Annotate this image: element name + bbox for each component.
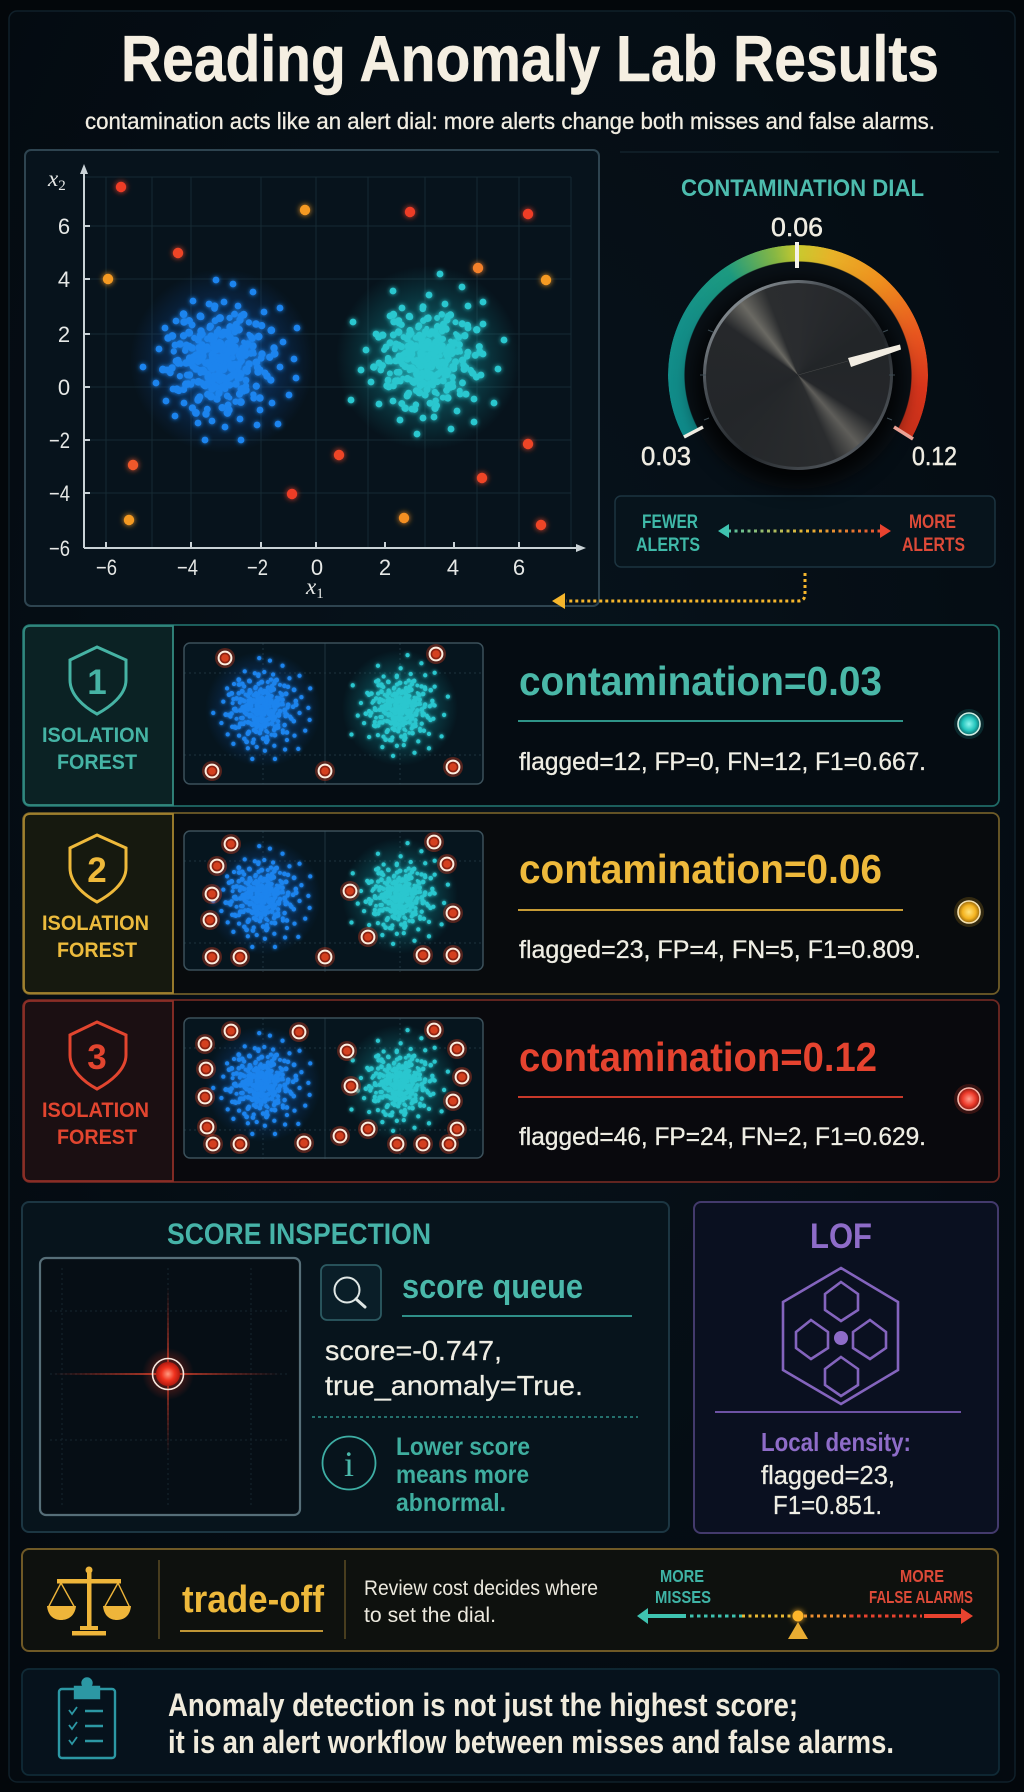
icon: shield 1: 1 — [87, 663, 107, 702]
panel: scatter plot — [25, 150, 599, 606]
heading: score inspection: SCORE INSPECTION — [167, 1218, 431, 1251]
knob pointer and scale ticks — [683, 242, 914, 440]
method label: FOREST — [57, 939, 137, 962]
outlier points — [103, 182, 551, 530]
axis title x2: 2 — [58, 178, 66, 194]
panel: fewer / more alerts: FEWER — [642, 512, 698, 533]
panel: fewer / more alerts: MORE — [909, 512, 956, 533]
subtitle: contamination acts like an alert dial: more alerts change both misses and false alarms. — [85, 108, 935, 134]
icon: shield 3 — [70, 1022, 126, 1089]
score values: true_anomaly=True. — [325, 1370, 583, 1401]
dial scale labels: 0.06 — [771, 212, 823, 242]
teal inlier cluster — [336, 266, 520, 450]
icon: info — [322, 1436, 376, 1490]
note: lower score: abnormal. — [396, 1489, 506, 1517]
mini scatter 3 — [184, 1018, 483, 1159]
method label: ISOLATION — [42, 724, 149, 747]
label: more false alarms: FALSE ALARMS — [869, 1587, 973, 1607]
status light 3 — [954, 1084, 984, 1114]
metrics 2: flagged=23, FP=4, FN=5, F1=0.809. — [519, 936, 921, 964]
axis tick labels: 6 — [513, 555, 525, 580]
panel: row 3 contamination 0.12 — [23, 1000, 999, 1182]
icon: hexagon neighbourhood — [783, 1268, 898, 1404]
takeaway text: it is an alert workflow between misses and false alarms. — [168, 1724, 894, 1760]
axis tick labels: 0 — [58, 375, 70, 400]
axis tick labels: −6 — [49, 536, 70, 561]
heading: contamination 0.12: contamination=0.12 — [519, 1034, 877, 1080]
method label: FOREST — [57, 751, 137, 774]
method label: ISOLATION — [42, 912, 149, 935]
icon: magnifier — [321, 1265, 381, 1320]
blue inlier cluster — [130, 269, 314, 453]
axis tick labels: −2 — [49, 428, 70, 453]
axis tick labels: 6 — [58, 214, 70, 239]
dial: contamination knob — [668, 242, 928, 496]
panel: LOF — [694, 1202, 998, 1533]
note: lower score: means more — [396, 1461, 529, 1489]
label: more misses: MISSES — [655, 1587, 711, 1607]
axis tick labels: 2 — [379, 555, 391, 580]
takeaway text: Anomaly detection is not just the highest score; — [168, 1687, 798, 1723]
label: more false alarms — [869, 1566, 973, 1607]
axis tick labels: −6 — [96, 555, 117, 580]
arrow: dial to plot connector — [552, 573, 805, 609]
mini scatter 1 — [184, 643, 483, 784]
heading: contamination 0.06: contamination=0.06 — [519, 846, 882, 892]
arrow: misses to false alarms balance — [637, 1608, 973, 1639]
method label: ISOLATION — [42, 1099, 149, 1122]
axis tick labels — [49, 214, 525, 580]
panel: score inspection — [22, 1202, 669, 1532]
icon: info: i — [344, 1444, 354, 1484]
knob face — [706, 283, 890, 467]
method label — [42, 912, 149, 962]
panel: fewer / more alerts: ALERTS — [636, 535, 700, 556]
method label: FOREST — [57, 1126, 137, 1149]
axis tick labels: 4 — [58, 267, 70, 292]
note: lower score: Lower score — [396, 1433, 530, 1461]
knob bezel — [703, 280, 893, 470]
icon: balance scales — [47, 1566, 131, 1636]
metrics 1: flagged=12, FP=0, FN=12, F1=0.667. — [519, 748, 926, 776]
axis title x2: x — [48, 166, 58, 191]
icon: shield 2: 2 — [87, 851, 107, 890]
axis title x1: x — [306, 574, 316, 599]
trade-off text: to set the dial. — [364, 1604, 496, 1627]
icon: shield 1 — [70, 647, 126, 714]
dial scale labels — [641, 212, 957, 471]
icon: clipboard checklist — [59, 1678, 115, 1758]
trade-off text — [364, 1577, 598, 1627]
dial scale labels: 0.12 — [912, 441, 957, 471]
dial scale labels: 0.03 — [641, 441, 691, 471]
axes — [80, 164, 586, 552]
panel: fewer / more alerts: ALERTS — [902, 535, 965, 556]
method label — [42, 724, 149, 774]
lof text: F1=0.851. — [773, 1490, 882, 1520]
score values — [325, 1335, 583, 1401]
lof text: flagged=23, — [761, 1460, 895, 1490]
icon: shield 3: 3 — [87, 1038, 107, 1077]
dial inner track — [684, 261, 912, 489]
heading: score queue: score queue — [402, 1268, 583, 1306]
status light 1 — [954, 709, 984, 739]
mini scatter 2 — [184, 831, 483, 972]
axis title x1: 1 — [316, 586, 324, 602]
label: more false alarms: MORE — [900, 1566, 944, 1586]
panel: row 2 contamination 0.06 — [23, 813, 999, 994]
dial gradient arc — [668, 245, 928, 438]
metrics 3: flagged=46, FP=24, FN=2, F1=0.629. — [519, 1123, 926, 1151]
heading: trade-off: trade-off — [182, 1579, 324, 1621]
trade-off text: Review cost decides where — [364, 1577, 598, 1600]
dial heading: CONTAMINATION DIAL — [681, 175, 924, 202]
axis tick labels: 0 — [311, 555, 323, 580]
score values: score=-0.747, — [325, 1335, 502, 1366]
panel: row 1 contamination 0.03 — [23, 625, 999, 806]
method label — [42, 1099, 149, 1149]
divider above dial — [620, 151, 999, 153]
heading: contamination 0.03: contamination=0.03 — [519, 658, 882, 704]
icon: shield 2 — [70, 835, 126, 902]
panel: fewer / more alerts — [615, 496, 995, 567]
status light 2 — [954, 897, 984, 927]
arrow: fewer to more — [718, 524, 891, 538]
panel: takeaway — [22, 1669, 999, 1775]
axis tick labels: 4 — [447, 555, 459, 580]
label: more misses: MORE — [660, 1566, 704, 1586]
anomaly spotlight — [40, 1258, 300, 1515]
axis tick labels: 2 — [58, 322, 70, 347]
takeaway text — [168, 1687, 894, 1760]
label: more misses — [655, 1566, 711, 1607]
lof text — [761, 1427, 911, 1520]
axis tick labels: −4 — [177, 555, 198, 580]
axis tick labels: −4 — [49, 481, 70, 506]
lof text: Local density: — [761, 1427, 911, 1457]
panel: trade-off — [22, 1549, 998, 1651]
heading: LOF: LOF — [810, 1217, 872, 1256]
note: lower score — [396, 1433, 530, 1517]
axis tick labels: −2 — [247, 555, 268, 580]
